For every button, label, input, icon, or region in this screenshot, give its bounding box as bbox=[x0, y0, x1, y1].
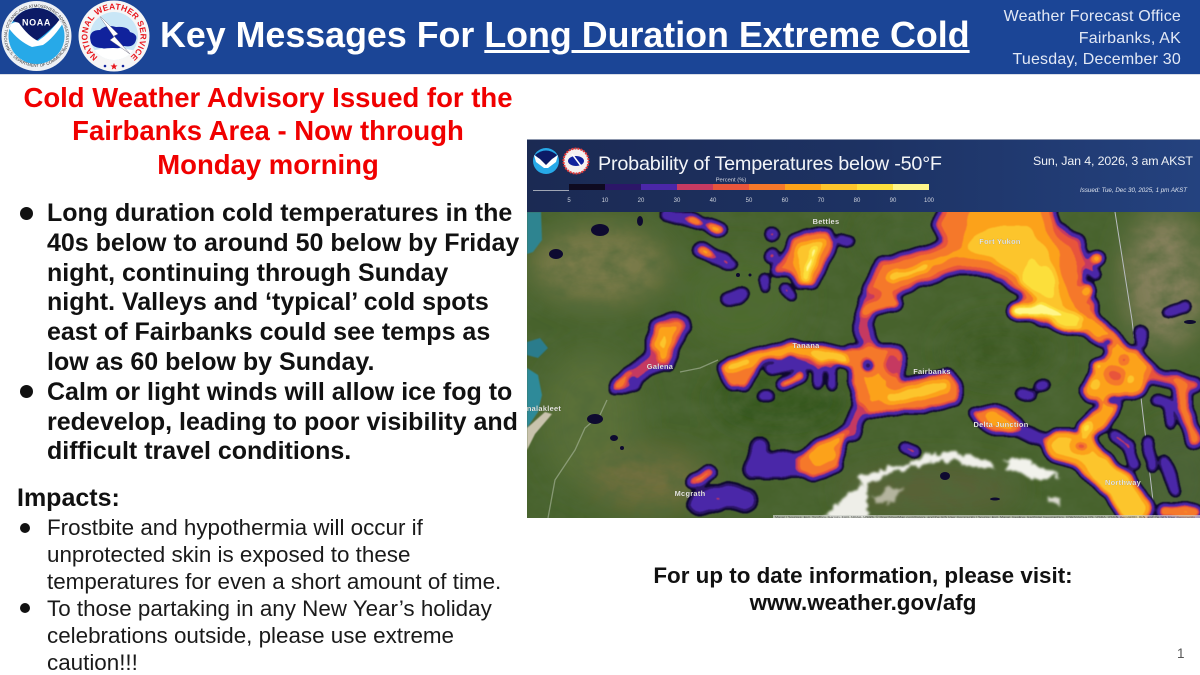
legend: 80 bbox=[854, 198, 861, 204]
key message bullets: low as 60 below by Sunday. bbox=[47, 348, 374, 376]
legend: 5 bbox=[567, 198, 571, 204]
legend: 60 bbox=[782, 198, 789, 204]
impacts section: Impacts: bbox=[17, 484, 120, 512]
eastern band holes bbox=[1077, 339, 1126, 448]
issued time: Issued: Tue, Dec 30, 2025, 1 pm AKST bbox=[1080, 187, 1188, 194]
legend: 100 bbox=[924, 198, 935, 204]
slide number: 1 bbox=[1177, 646, 1185, 661]
advisory heading: Fairbanks Area - Now through bbox=[72, 115, 464, 146]
Fort Yukon yellow core bbox=[1018, 256, 1058, 298]
impacts section bbox=[17, 484, 501, 674]
city labels bbox=[527, 217, 1142, 498]
terrain base bbox=[527, 212, 1200, 518]
icon: small NWS logo bbox=[564, 148, 588, 174]
map date: Sun, Jan 4, 2026, 3 am AKST bbox=[1033, 154, 1193, 168]
map header panel bbox=[527, 139, 1200, 212]
key message bullets: Long duration cold temperatures in the bbox=[47, 199, 512, 227]
icon: NOAA logo: NATIONAL OCEANIC AND ATMOSPHERIC ADMINISTRATION bbox=[4, 4, 69, 50]
city labels: Fairbanks bbox=[913, 367, 951, 376]
city labels: Fort Yukon bbox=[979, 237, 1021, 246]
office info: Tuesday, December 30 bbox=[1012, 51, 1181, 68]
impacts section: unprotected skin is exposed to these bbox=[47, 542, 410, 566]
city labels: Mcgrath bbox=[675, 489, 706, 498]
advisory heading: Monday morning bbox=[157, 148, 379, 180]
Fort Yukon arm core and fringe bbox=[892, 230, 1097, 324]
legend: 10 bbox=[602, 198, 609, 204]
icon: National Weather Service logo: NATIONAL WEATHER SERVICE bbox=[82, 4, 146, 61]
key message bullets: redevelop, leading to poor visibility and bbox=[47, 408, 518, 436]
header banner bbox=[0, 0, 1200, 75]
key message bullets: difficult travel conditions. bbox=[47, 437, 351, 465]
icon: NOAA logo: NOAA bbox=[22, 18, 51, 28]
probability map bbox=[527, 139, 1200, 518]
impacts section: To those partaking in any New Year’s holiday bbox=[47, 596, 492, 620]
Tanana to Yukon link bbox=[862, 300, 895, 345]
office info: Weather Forecast Office bbox=[1004, 8, 1181, 25]
Denali foothill blob bbox=[752, 430, 845, 478]
key message bullets: 40s below to around 50 below by Friday bbox=[47, 229, 519, 257]
advisory heading bbox=[24, 82, 512, 180]
city labels: nalakleet bbox=[527, 404, 561, 413]
impacts section: celebrations outside, please use extreme bbox=[47, 622, 454, 648]
icon: NOAA logo: U.S. DEPARTMENT OF COMMERCE bbox=[8, 48, 66, 67]
icon: NOAA logo bbox=[2, 1, 72, 71]
key message bullets bbox=[20, 199, 520, 465]
website call to action: www.weather.gov/afg bbox=[750, 590, 976, 614]
legend: 30 bbox=[674, 198, 681, 204]
legend: 20 bbox=[638, 198, 645, 204]
legend: 70 bbox=[818, 198, 825, 204]
Galena bbox=[612, 316, 688, 390]
city labels: Delta Junction bbox=[973, 420, 1029, 429]
snow: Alaska Range bbox=[822, 452, 1062, 518]
McGrath basin bbox=[693, 472, 745, 503]
legend: 50 bbox=[746, 198, 753, 204]
advisory heading: Cold Weather Advisory Issued for the bbox=[24, 82, 512, 112]
icon: small NOAA logo bbox=[533, 148, 559, 174]
website call to action bbox=[653, 562, 1073, 614]
legend bbox=[533, 178, 935, 204]
key message bullets: east of Fairbanks could see temps as bbox=[47, 318, 490, 346]
Fort Yukon amber band bbox=[922, 225, 1072, 316]
key message bullets: Calm or light winds will allow ice fog to bbox=[47, 378, 512, 406]
title: Key Messages For Long Duration Extreme Cold bbox=[160, 15, 970, 55]
state boundary line bbox=[1115, 212, 1155, 518]
Fort Yukon outer shell bbox=[866, 205, 1095, 330]
office info bbox=[1004, 8, 1181, 68]
water: Norton Sound and Kotzebue bbox=[527, 212, 552, 450]
Delta Junction blob bbox=[905, 385, 1050, 452]
eastern main band bbox=[1060, 322, 1152, 510]
office info: Fairbanks, AK bbox=[1079, 30, 1181, 47]
impacts section: temperatures for even a short amount of time. bbox=[47, 568, 501, 594]
key message bullets: night, continuing through Sunday bbox=[47, 259, 448, 287]
dark low-probability patches bbox=[549, 216, 1196, 500]
weak streaks bbox=[665, 216, 848, 299]
impacts section: Frostbite and hypothermia will occur if bbox=[47, 514, 423, 540]
website call to action: For up to date information, please visit: bbox=[653, 562, 1073, 588]
city labels: Northway bbox=[1105, 478, 1142, 487]
city labels: Tanana bbox=[792, 341, 820, 350]
legend: Percent (%) bbox=[716, 178, 746, 184]
map title: Probability of Temperatures below -50°F bbox=[598, 153, 942, 175]
Tanana band bbox=[722, 350, 860, 396]
probability contours bbox=[608, 212, 1200, 518]
city labels: Galena bbox=[647, 362, 674, 371]
Fort Yukon orange band bbox=[880, 205, 1082, 322]
river bbox=[548, 360, 718, 518]
Fairbanks blob bbox=[848, 346, 958, 432]
Bettles bbox=[778, 232, 834, 286]
legend: 90 bbox=[890, 198, 897, 204]
key message bullets: night. Valleys and ‘typical’ cold spots bbox=[47, 288, 489, 316]
impacts section: caution!!! bbox=[47, 650, 138, 674]
legend: 40 bbox=[710, 198, 717, 204]
eastern chain bbox=[1141, 306, 1195, 512]
city labels: Bettles bbox=[813, 217, 839, 226]
Fort Yukon gold core bbox=[965, 228, 1062, 306]
